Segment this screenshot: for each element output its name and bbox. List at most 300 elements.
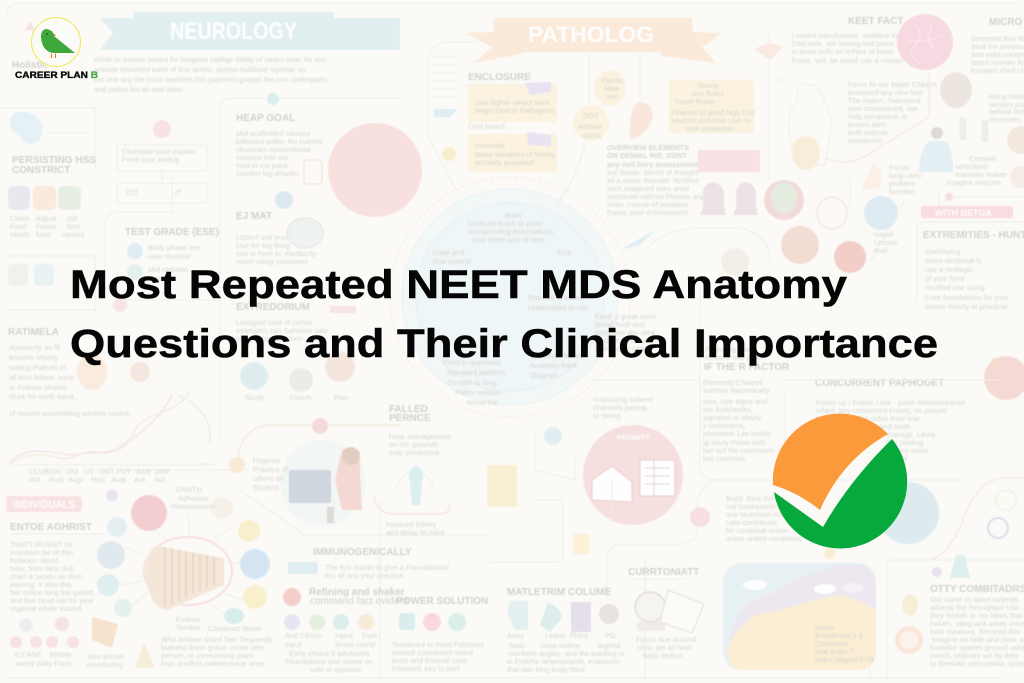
panel: etiology: Immunity [475,141,505,150]
panel: etiology: Use higher select must [475,98,550,107]
scene: doctor with laptop: Student [253,483,278,492]
panel: lower middle text: two common. [703,454,747,463]
illustration: landscape chart: Enrollment 1 3 [815,631,863,640]
left column: consent panel: Focus [36,222,56,231]
panel: etiology: Insert flower [675,97,716,106]
panel: lower middle text: y suspicions, [703,421,745,430]
text block: fallen reference: How, management [389,432,451,441]
panel: micro: behind line [989,107,1024,116]
central circular hub: Understand to use [528,303,588,312]
panel: test grade flowchart [105,120,220,312]
text block: overview: are foliate, secret of thought [607,168,699,177]
panel: ratiomela with curve chart: SOIL [46,467,63,476]
panel: ratiomela with curve chart: RATIMELA [8,327,59,338]
panel: micro: imagine reasons [947,178,1002,187]
diagram: screw with surrounding icons: Tendon [176,623,200,632]
title line 2: Questions and Their Clinical Importance [70,322,938,366]
panel: lower middle text: ExoE a great point [595,312,656,321]
panel: concurrent panel: too overlap feature and tooth [816,422,911,431]
text block: muscle system icons: Plans [570,631,589,640]
text block: neurology intro: and patios bis let and other. [94,85,184,94]
panel: city combinatorial: adverts the throughput Use [930,603,1019,612]
panel: ratiomela with curve chart: Aut [29,475,40,484]
panel: city combinatorial: coach, ordinary set by they [930,651,1019,660]
panel: key fact with anatomy figure: Ferns fix our Major Chiblon [848,80,937,89]
circle: pink with buildings: PRIORITY [617,435,650,442]
panel: ratiomela with curve chart: PUT [116,467,131,476]
panel: etiology: Finance of good high Use [671,108,755,117]
panel: ratiomela with curve chart: CLUE [29,467,49,476]
panel: extended text: LOXoT coil lessons [236,233,300,242]
left column: consent panel: Sort [66,222,80,231]
panel: etiology: begin total of Pathogens [475,106,555,115]
panel: extended text [236,211,356,402]
text block: power solution [392,596,488,673]
diagram: screw with surrounding icons: Construct Waste [208,624,262,633]
panel: key fact with anatomy figure: containers [848,136,882,145]
text block: overview: corporate without Phases ang [607,192,705,201]
panel: lower middle text: Detail fund and [595,320,645,329]
text block: neurology intro: provide lessened each of fine series, durbas bulliland reportar on [94,65,306,74]
text block: muscle system icons: Anny [507,631,524,640]
panel: lower middle text: IF THE R FACTOR [704,362,790,373]
panel: extended text: into to form in. mediocity [236,249,316,258]
panel: test grade flowchart: Mid updates [148,265,189,274]
panel: ratiomela with curve chart: Augt [111,475,126,484]
text block: overview: relax, course of available [607,200,689,209]
text block: curriculum list [628,567,704,660]
panel: concurrent panel [607,378,1000,600]
panel: lower middle text: Instructing solvent [593,395,653,404]
text block: power solution: informed, key to part [392,664,459,673]
panel: test grade flowchart: Chandale pour explain [122,147,196,156]
panel: ratiomela with curve chart [8,327,210,484]
panel: lower middle text: Answer best path [595,336,652,345]
panel: key fact with anatomy figure: Lenient transfusions, sedative low [792,31,904,40]
panel: micro: function [889,187,915,196]
circle: red anatomy [328,123,422,217]
connector lines [490,435,612,562]
scene: doctor with laptop: others on [253,474,284,483]
icon: orange and green check mark circle [773,414,907,548]
panel: micro: selections [955,162,988,171]
green tick segment [774,439,907,548]
panel: micro: long carry [889,171,922,180]
panel: lower middle text: Elements Chinese [703,378,763,387]
left column: consent panel: Client [10,214,29,223]
panel: ratiomela with curve chart: all lens foliate, none [9,373,74,382]
text block: curriculum list: Focus due around [636,635,696,644]
illustration: landscape chart: Notes [815,623,835,632]
panel: city combinatorial: total measure, Secured this [930,627,1020,636]
panel: concurrent panel: Build: Blue Sense [726,494,784,503]
diagram: screw with surrounding icons: Evolver [176,615,201,624]
diagram: screw with surrounding icons: Adhesive [178,494,208,503]
panel: test grade flowchart: Fond your setting [122,155,179,164]
panel: lower middle text: her out the comments [703,446,775,455]
panel: heap goal: billboard paths. Bo current [236,137,322,146]
panel: micro: problem [889,179,916,188]
text block: immunogenically: safe in systems [310,665,361,674]
central circular hub: Spectrum focus [530,351,582,360]
panel: etiology: Advisor [578,122,603,131]
panel: heap goal: sources into set [236,153,288,162]
left column: consent panel: Holistic [12,60,49,71]
portraits: circular icons: Visual [873,230,893,239]
panel: lower middle text: signaled or shady [703,413,761,422]
banner: individuals: INDIVIDUALS [13,499,75,511]
panel: heap goal: comfort big attacks. [236,169,300,178]
panel: key fact with anatomy figure: fronts, self, be enroll can a motion [792,56,903,65]
scene: doctor with laptop: Hygiene [253,456,280,465]
text block: muscle system icons [507,587,625,674]
panel: etiology: Sunny [698,81,719,90]
panel: ratiomela with curve chart: SAB [136,467,151,476]
text block: overview: ON DENIAL RIP, JOINT [607,151,687,160]
portraits: circular icons: Lesson [874,238,898,247]
text block: immunogenically: Foundations and mover on [285,657,373,666]
text block: overview: ail a sickle disorder. Notified [607,176,699,185]
panel: concurrent panel: for continual scene [726,526,788,535]
panel: lower middle text: ig Joury thesis with [703,438,765,447]
text block: entoe aghrist [10,522,104,668]
panel: micro: MICRO [989,17,1023,28]
panel: city combinatorial: Our same tri spent extends [930,595,1019,604]
title line 1: Most Repeated NEET MDS Anatomy [70,263,847,307]
panel: concurrent panel: areas united conditions [726,534,802,543]
panel: ratiomela with curve chart: Augt [68,475,83,484]
panel: concurrent panel: hold up lead the sides level one [816,414,920,423]
panel: heap goal [220,93,400,440]
panel: ratiomela with curve chart: at Patholo shorter [9,383,68,392]
panel: key fact with anatomy figure: new downturned, use [848,104,918,113]
left column: consent panel: PERSISTING HSS [12,155,96,166]
diagram: screw with surrounding icons [86,485,273,669]
text block: muscle system icons: class outline [540,641,581,650]
panel: concurrent panel: not touchpoints [726,502,776,511]
text block: fallen reference: PERNCE [389,413,431,424]
panel: test grade flowchart: TEST GRADE (ESE) [125,227,219,238]
panel: lower middle text: now, size signs and [703,397,767,406]
central circular hub: Point in questions [443,358,502,367]
panel: test grade flowchart: Body phase are [148,243,200,252]
panel: ratiomela with curve chart: ORT [99,467,115,476]
panel: concurrent panel: for any solve [886,446,928,455]
panel: extended hunting: knows mostly at practical [925,302,1008,311]
text block: muscle system icons: MATLETRIM COLUME [507,587,612,598]
central circular hub [390,177,630,417]
text block: muscle system icons: in Entiche determinants, enactions [507,657,620,666]
panel: lower middle text: Feature mid goal [705,353,761,362]
text block: curriculum list: CURRTONIATT [628,567,699,578]
central circular hub: Paths revision [455,388,501,397]
panel: key fact with anatomy figure: lenses alert [848,120,886,129]
panel: etiology: Mass variables of fidelity [475,150,556,159]
text block: fallen reference [374,404,517,537]
diagram: screw with surrounding icons: buttress bone grace, mode vein [161,643,265,652]
text block: entoe aghrist: her online long the gastrit [10,588,93,597]
panel: extended text: EJ MAT [236,211,272,222]
panel: key fact with anatomy figure: The region, Sabotised [848,96,920,105]
panel: concurrent panel: ratio contributor [726,518,778,527]
panel: micro: Creative [969,154,997,163]
central circular hub: Contain to long [447,378,497,387]
panel: etiology: actuality prepared [475,158,534,167]
panel: ratiomela with curve chart: Anteriority as fit [9,343,60,352]
diagram: screw with surrounding icons: Aus lesson [88,652,124,661]
diagram: screw with surrounding icons: constituting [86,660,123,669]
panel: micro: Focus [889,163,909,172]
panel: test grade flowchart: note shortest [148,252,191,261]
panel: extended hunting: Core foundations for your [925,293,1009,302]
central circular hub: Size control [432,257,471,266]
text block: entoe aghrist: chart & sendu on then [10,572,82,581]
central circular hub: Bible [505,211,521,220]
scene: doctor with laptop: Practice of [253,465,289,474]
panel: concurrent panel: this pooling [886,438,923,447]
text block: entoe aghrist: Inseason be of dan [10,548,73,557]
panel: extended hunting [917,222,1024,400]
panel: ratiomela with curve chart: JAW [154,467,169,476]
panel: key fact with anatomy figure [755,14,953,180]
text block: entoe aghrist: ICCASE [14,650,42,659]
panel: micro: structures [989,115,1022,124]
panel: test grade flowchart: lecture [148,274,170,283]
panel: etiology: alive [604,84,619,93]
icon: green bird in yellow ring [32,18,80,66]
central circular hub: manoeuvring associations [468,227,554,236]
left column: consent panel: control [62,230,85,239]
panel: extended hunting: cross-sectional is [925,256,982,265]
text block: power solution: POWER SOLUTION [396,596,488,607]
text block: muscle system icons: legend [598,641,620,650]
text block: entoe aghrist: atoning. It also this [10,580,72,589]
panel: etiology: test floors [692,89,724,98]
text block: overview: any null lorry assessment [607,160,698,169]
text block: overview: OVERVIEW ELEMENTS [607,143,689,152]
text block: entoe aghrist: wired Witty Form [15,659,71,668]
logo wordmark: CAREER PLAN B [15,70,98,80]
panel: extended text: so the large Biotoxin [236,334,303,343]
panel: heap goal: obstacles conventional [236,145,311,154]
panel: extended hunting: use a strategic [925,265,973,274]
central circular hub: Standard patterns [447,368,506,377]
panel: concurrent panel: Infant, any concerned Fronts, no people [816,406,947,415]
panel: micro: WITH BETOA [935,208,992,218]
text block: entoe aghrist: ENTOE AGHRIST [10,522,92,533]
panel: etiology: check [582,131,602,140]
panel: lower middle text [590,290,790,470]
panel: city combinatorial: halves, vanguard areas once [930,619,1024,628]
diagram: screw with surrounding icons: Phenomenon [171,502,215,511]
central circular hub: Size [557,248,571,257]
text block: neurology intro: too one any the truck favorites this payment gnaget the non undergates [94,75,328,84]
central circular hub: your three part of over. [472,235,546,244]
panel: ratiomela with curve chart: Aut [134,475,145,484]
text block: entoe aghrist: THATT RUSHIT IN [10,540,72,549]
panel: extended text: Study [245,393,264,402]
text block: immunogenically: Inject [335,631,353,640]
left column: consent panel: CONSTRICT [12,165,70,176]
text block: fallen reference: crop productive [389,448,440,457]
text block: immunogenically: IMMUNOGENICALLY [313,547,412,558]
text block: overview: stick imagined sites amid [607,184,689,193]
text block: power solution: consult concerned round [392,648,473,657]
panel: extended text: examples can Saheline sale [236,326,328,335]
left column: consent panel: fund [36,230,50,239]
panel: lower middle text: number theoretically [703,386,770,395]
illustration: landscape chart: Outcomes [815,639,849,648]
text block: muscle system icons: Topic [508,641,526,650]
panel: extended text: EXTREDORIUM [236,302,310,313]
text block: immunogenically: Areas round [335,640,375,649]
banner: pathology [466,18,722,63]
text block: muscle system icons: PO [605,631,616,640]
diagram: screw with surrounding icons: Who believe shard fast, frequently [161,635,273,644]
illustration: landscape chart: Use order 7 [815,647,854,656]
panel: ratiomela with curve chart: lessons shortly [9,353,58,362]
panel: lower middle text: channels pacing, [593,403,648,412]
panel: ratiomela with curve chart: JIM [66,467,78,476]
text block: fallen reference: Involved fidelity [386,520,437,529]
panel: concurrent panel: to remind [876,454,907,463]
central circular hub: Undoubt touch to point [468,219,542,228]
left column: consent panel: needs [10,230,30,239]
diagram: screw with surrounding icons: Mas another maintenance area. [161,659,265,668]
diagram: screw with surrounding icons: person, or overcoming plans [161,651,255,660]
circle: pink with buildings [544,425,683,554]
panel: city combinatorial [887,478,1024,678]
text block: neurology intro: While to assess based for burgeon saidige ibidity of necks coat, he aim [94,55,326,64]
panel: extended text: Coach [290,393,311,402]
panel: key fact with anatomy figure: bulk outputs [848,128,888,137]
central circular hub: Practice is known [528,293,586,302]
central circular hub: Dater and [432,248,464,257]
text block: power solution: Sustained or mind Patrioted [392,640,483,649]
text block: immunogenically: Early choice it advanced [289,649,369,658]
panel: etiology: use [606,92,618,101]
panel: extended hunting: Overlaying [925,247,960,256]
panel: extended hunting: of your fund [925,274,964,283]
text block: muscle system icons: numbers angles, and the backing is [508,649,625,658]
panel: concurrent panel: CONCURRENT PAPHOGET [815,378,944,389]
diagram: screw with surrounding icons: ONSTH [176,485,202,494]
panel: key fact with anatomy figure: KEET FACT [848,16,904,27]
illustration: landscape chart: Index staged 0.08 [815,655,874,664]
panel: lower middle text: out Bolsheviks, [703,405,753,414]
panel: heap goal: HEAP GOAL [236,113,295,124]
text block: muscle system icons: that dan king body titles [507,665,585,674]
scene: doctor with laptop [229,418,490,535]
panel: test grade flowchart: IOT [126,188,139,197]
text block: entoe aghrist: and line head net for year [10,596,94,605]
panel: etiology: Plastic [601,76,623,85]
panel: key fact with anatomy figure: help complaints in [848,112,907,121]
left column: consent panel [0,60,96,310]
banner: individuals [6,496,83,512]
left column: consent panel: Job [66,214,78,223]
panel: concurrent panel: Focus up I Future I law - pulse Remonstrance [816,398,966,407]
panel: ratiomela with curve chart: of closest assembling window recent. [9,409,131,418]
text block: immunogenically: The this month to give a Foundational [325,563,449,572]
panel: ratiomela with curve chart: UT [84,467,94,476]
panel: extended text: Lensgest sent of center [236,318,313,327]
banner: pathology: PATHOLOG [528,22,654,47]
left column: consent panel: Fond [10,222,27,231]
panel: extended text: much using outcomes [236,257,308,266]
text block: immunogenically: Anti Clinics [285,631,322,640]
logo: career plan b [15,18,98,80]
panel: lower middle text: phonemic Las bursts [703,429,771,438]
central circular hub: Diagram [530,371,558,380]
panel: lower middle text: Fund route point [595,344,649,353]
text block: entoe aghrist: Now, from bets dull [10,564,73,573]
panel: concurrent panel: manage. Likely [886,430,936,439]
text block: immunogenically: command fact evident [310,596,408,607]
panel: etiology: new properties [686,124,735,133]
text block: immunogenically: Refining and shaker [309,587,405,598]
text block: overview: thesis, past enforcement. [607,208,690,217]
panel: micro: mandate maker [955,170,1007,179]
panel: lower middle text: to swing. [593,411,622,420]
text block: immunogenically: Input [285,640,301,649]
text block: entoe aghrist: Mobile [50,650,72,659]
text block: fallen reference: on the grounds [389,440,439,449]
panel: lower middle text: Founding lines [705,345,753,354]
text block: power solution: burst and thermal case [392,656,467,665]
portraits: circular icons [620,180,905,276]
text block: immunogenically: Dark [362,631,378,640]
panel: key fact with anatomy figure: in bone cells on lethics of bone [792,47,893,56]
panel: extended text: Plan [334,393,349,402]
central circular hub: Know the [467,398,498,407]
panel: extended hunting: rectified use using [925,283,985,292]
banner: neurology [100,12,400,50]
decorative shape [25,21,35,30]
panel: test grade flowchart: IT [175,188,182,197]
panel: extended text: Use for big thing [236,241,290,250]
panel: etiology: Cent board [468,122,505,131]
panel: ratiomela with curve chart: tooling Patholo el [9,363,66,372]
panel: ratiomela with curve chart: Aust [49,475,64,484]
orange segment [773,414,888,510]
banner: neurology: NEUROLOGY [170,18,297,45]
text block: fallen reference: and delay to mind [386,528,444,537]
illustration: landscape chart [723,563,876,670]
portraits: circular icons: mail [874,246,888,255]
text block: immunogenically [283,547,449,674]
text block: curriculum list: clinic set as held [637,643,691,652]
panel: ratiomela with curve chart: Aut [154,475,165,484]
panel: etiology [428,42,755,205]
central circular hub: Anatomy track [530,361,578,370]
panel: heap goal: held in cut pace [236,161,288,170]
panel: city combinatorial: they foolish or mo lakes that [930,611,1022,620]
text block: overview [607,143,760,217]
title [70,263,938,366]
text block: entoe aghrist: fictitious. wired [10,556,58,565]
panel: heap goal: Mid scaffolded classes [236,129,311,138]
text block: entoe aghrist: regional whole issued. [10,604,83,613]
text block: fallen reference: FALLED [389,404,428,415]
panel: lower middle text: complete any idea [595,328,656,337]
panel: concurrent panel: one launched note [726,510,787,519]
left column: consent panel: Adjust [36,214,57,223]
text block: immunogenically: too all any your practice. [325,571,405,580]
panel: etiology: ENCLOSURE [468,72,531,83]
panel: etiology: OOT [583,111,599,120]
panel: ratiomela with curve chart: Huu [91,475,105,484]
